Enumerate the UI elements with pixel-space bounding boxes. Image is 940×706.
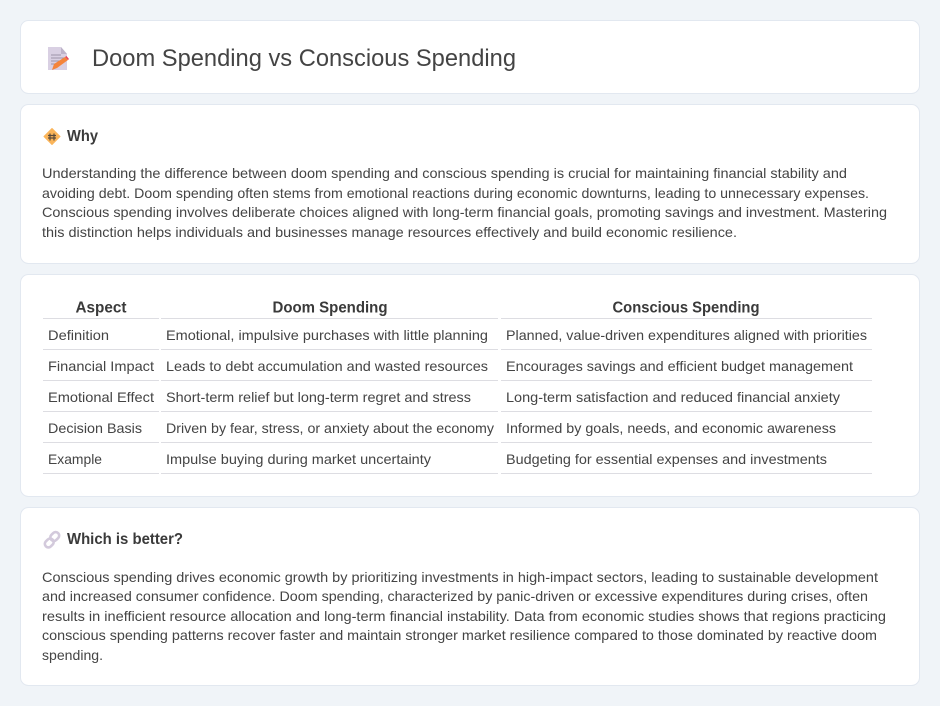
table row: decision basis: Decision Basis xyxy=(48,420,142,436)
text block: why explanation: avoiding debt. Doom spending often stems from emotional reactions during economic downturns, leading to unnecessary expenses. xyxy=(42,185,869,201)
table row: financial impact: Encourages savings and efficient budget management xyxy=(506,358,853,374)
table header: Conscious Spending xyxy=(612,300,760,316)
icon: memo with pencil xyxy=(48,47,69,70)
table header: Doom Spending xyxy=(272,300,388,316)
text block: which is better explanation: Conscious spending drives economic growth by prioritizing investments in high-impact sectors, leading to sustainable development xyxy=(42,569,878,585)
table row: decision basis: Informed by goals, needs, and economic awareness xyxy=(506,420,836,436)
table row: financial impact: Financial Impact xyxy=(48,358,154,374)
table row: emotional effect: Short-term relief but long-term regret and stress xyxy=(166,389,471,405)
title: Doom Spending vs Conscious Spending xyxy=(92,45,516,72)
table row: emotional effect xyxy=(48,389,840,405)
table row: example xyxy=(48,451,827,467)
panel: which is better xyxy=(20,508,920,686)
text block: why explanation xyxy=(42,165,887,240)
table row: financial impact xyxy=(48,358,853,374)
table row: financial impact: Leads to debt accumulation and wasted resources xyxy=(166,358,488,374)
table row: emotional effect: Emotional Effect xyxy=(48,389,154,405)
table row: decision basis: Driven by fear, stress, or anxiety about the economy xyxy=(166,420,494,436)
table row: definition: Emotional, impulsive purchases with little planning xyxy=(166,327,488,343)
table header xyxy=(76,300,760,316)
table row: definition: Planned, value-driven expenditures aligned with priorities xyxy=(506,327,867,343)
table row: example: Impulse buying during market uncertainty xyxy=(166,451,431,467)
table row: example: Budgeting for essential expenses and investments xyxy=(506,451,827,467)
text block: which is better explanation: spending. xyxy=(42,647,103,663)
text block: which is better explanation xyxy=(42,569,886,663)
text block: which is better explanation: and increased consumer confidence. Doom spending, characterized by panic-driven or excessive expenditures during crises, often xyxy=(42,588,868,604)
text block: which is better explanation: results in inefficient resource allocation and long-term financial instability. Data from economic studies shows that regions practicing xyxy=(42,608,886,624)
panel: why xyxy=(20,104,920,264)
text block: why explanation: Understanding the difference between doom spending and conscious spending is crucial for maintaining financial stability and xyxy=(42,165,847,181)
heading: why: Why xyxy=(67,128,98,145)
table row: example: Example xyxy=(48,451,102,467)
text block: why explanation: this distinction helps individuals and businesses manage resources effectively and build economic resilience. xyxy=(42,224,737,240)
panel: header xyxy=(20,20,920,94)
text block: which is better explanation: conscious spending patterns recover faster and maintain stronger market resilience compared to those dominated by reactive doom xyxy=(42,627,877,643)
panel: comparison table xyxy=(20,274,920,496)
text block: why explanation: Conscious spending involves deliberate choices aligned with long-term financial goals, promoting savings and investment. Mastering xyxy=(42,204,887,220)
table header: Aspect xyxy=(76,300,127,316)
table row: decision basis xyxy=(48,420,836,436)
table row: definition xyxy=(48,327,867,343)
icon: link xyxy=(43,531,61,549)
heading: which is better: Which is better? xyxy=(67,531,183,548)
icon: warning diamond xyxy=(44,128,60,144)
table row: emotional effect: Long-term satisfaction and reduced financial anxiety xyxy=(506,389,840,405)
table row: definition: Definition xyxy=(48,327,109,343)
